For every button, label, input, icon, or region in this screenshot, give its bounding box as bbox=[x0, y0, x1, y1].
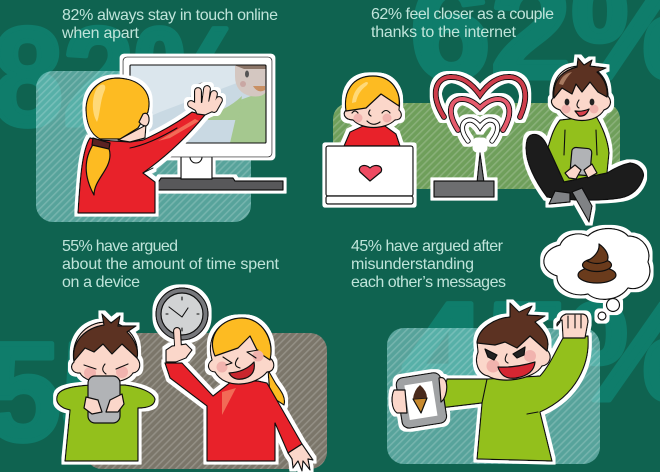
heart on laptop bbox=[359, 165, 382, 181]
angry face bbox=[84, 364, 128, 379]
text: 55% statement: about the amount of time spent bbox=[62, 256, 280, 273]
text: 45% statement: 45% have argued after bbox=[351, 238, 504, 255]
text: 55% statement: on a device bbox=[62, 274, 140, 291]
text: 45% statement: misunderstanding bbox=[351, 256, 474, 273]
hair bbox=[212, 318, 271, 360]
blonde hair bbox=[345, 76, 399, 111]
illustration: girl waving at screen bbox=[78, 78, 219, 213]
red top bbox=[344, 126, 400, 146]
angry face bbox=[485, 347, 536, 378]
antenna bbox=[477, 153, 484, 182]
desk bar bbox=[150, 178, 283, 190]
shoes bbox=[549, 188, 592, 222]
hair bbox=[74, 314, 138, 361]
panel: 45% backdrop bbox=[387, 328, 600, 464]
poo bbox=[578, 244, 616, 283]
illustration: thought bubble with poo bbox=[544, 228, 650, 320]
hair bbox=[477, 303, 548, 351]
red body bbox=[165, 363, 302, 461]
ponytail bbox=[86, 143, 110, 195]
text: 82% statement: when apart bbox=[61, 25, 140, 42]
monitor stand bbox=[181, 155, 212, 179]
right hand bbox=[288, 444, 313, 471]
phone with ice cream bbox=[395, 372, 448, 429]
illustration: girl shouting pointing at clock bbox=[156, 288, 313, 471]
cloud bbox=[544, 228, 650, 299]
ponytail bbox=[268, 370, 285, 405]
illustration: angry boy with phone bbox=[392, 303, 588, 461]
pointing hand bbox=[166, 331, 192, 362]
illustration: boy with phone frowning bbox=[57, 314, 155, 461]
panel: 82% backdrop bbox=[36, 71, 251, 222]
fingers bbox=[392, 378, 447, 413]
text: 45% statement: each other’s messages bbox=[351, 274, 506, 291]
illustration: girl with laptop bbox=[326, 76, 413, 204]
waving hand bbox=[191, 89, 219, 115]
text: 62% statement: 62% feel closer as a couple bbox=[371, 6, 554, 23]
panel: 62% backdrop bbox=[333, 103, 620, 189]
head bbox=[344, 76, 401, 128]
head bbox=[476, 319, 550, 380]
red body and arm bbox=[78, 112, 205, 213]
clock bbox=[156, 288, 208, 340]
shouting face bbox=[216, 350, 264, 379]
illustration: boy sitting with phone bbox=[526, 58, 643, 222]
hair bbox=[86, 78, 149, 139]
panel: 55% backdrop bbox=[85, 333, 327, 469]
hands bbox=[84, 394, 124, 414]
router base bbox=[434, 181, 494, 197]
head bbox=[551, 66, 611, 120]
phone and hands bbox=[565, 147, 597, 179]
bubble dots bbox=[598, 298, 620, 320]
text: 82% statement: 82% always stay in touch online bbox=[62, 7, 278, 24]
illustration: computer monitor with video call bbox=[123, 57, 283, 190]
screen bbox=[130, 65, 266, 143]
face bbox=[352, 110, 392, 124]
hair bbox=[554, 58, 607, 98]
text: 62% statement: thanks to the internet bbox=[371, 24, 517, 41]
illustration: heart wifi router bbox=[434, 77, 525, 197]
outer heart signal bbox=[436, 77, 525, 141]
antenna tip bbox=[476, 141, 484, 149]
head bbox=[208, 318, 274, 384]
raised fist bbox=[557, 314, 588, 338]
text: 55% statement: 55% have argued bbox=[62, 238, 178, 255]
monitor frame bbox=[123, 57, 272, 157]
hair tie bbox=[92, 138, 110, 149]
green jumper bbox=[440, 336, 588, 461]
green jumper bbox=[57, 385, 155, 461]
black legs bbox=[526, 134, 643, 200]
ear bbox=[139, 113, 149, 126]
laptop bbox=[326, 146, 413, 204]
head bbox=[72, 322, 140, 383]
face bbox=[562, 99, 598, 116]
green torso bbox=[548, 116, 609, 182]
neck bbox=[118, 125, 146, 142]
phone bbox=[88, 376, 120, 423]
